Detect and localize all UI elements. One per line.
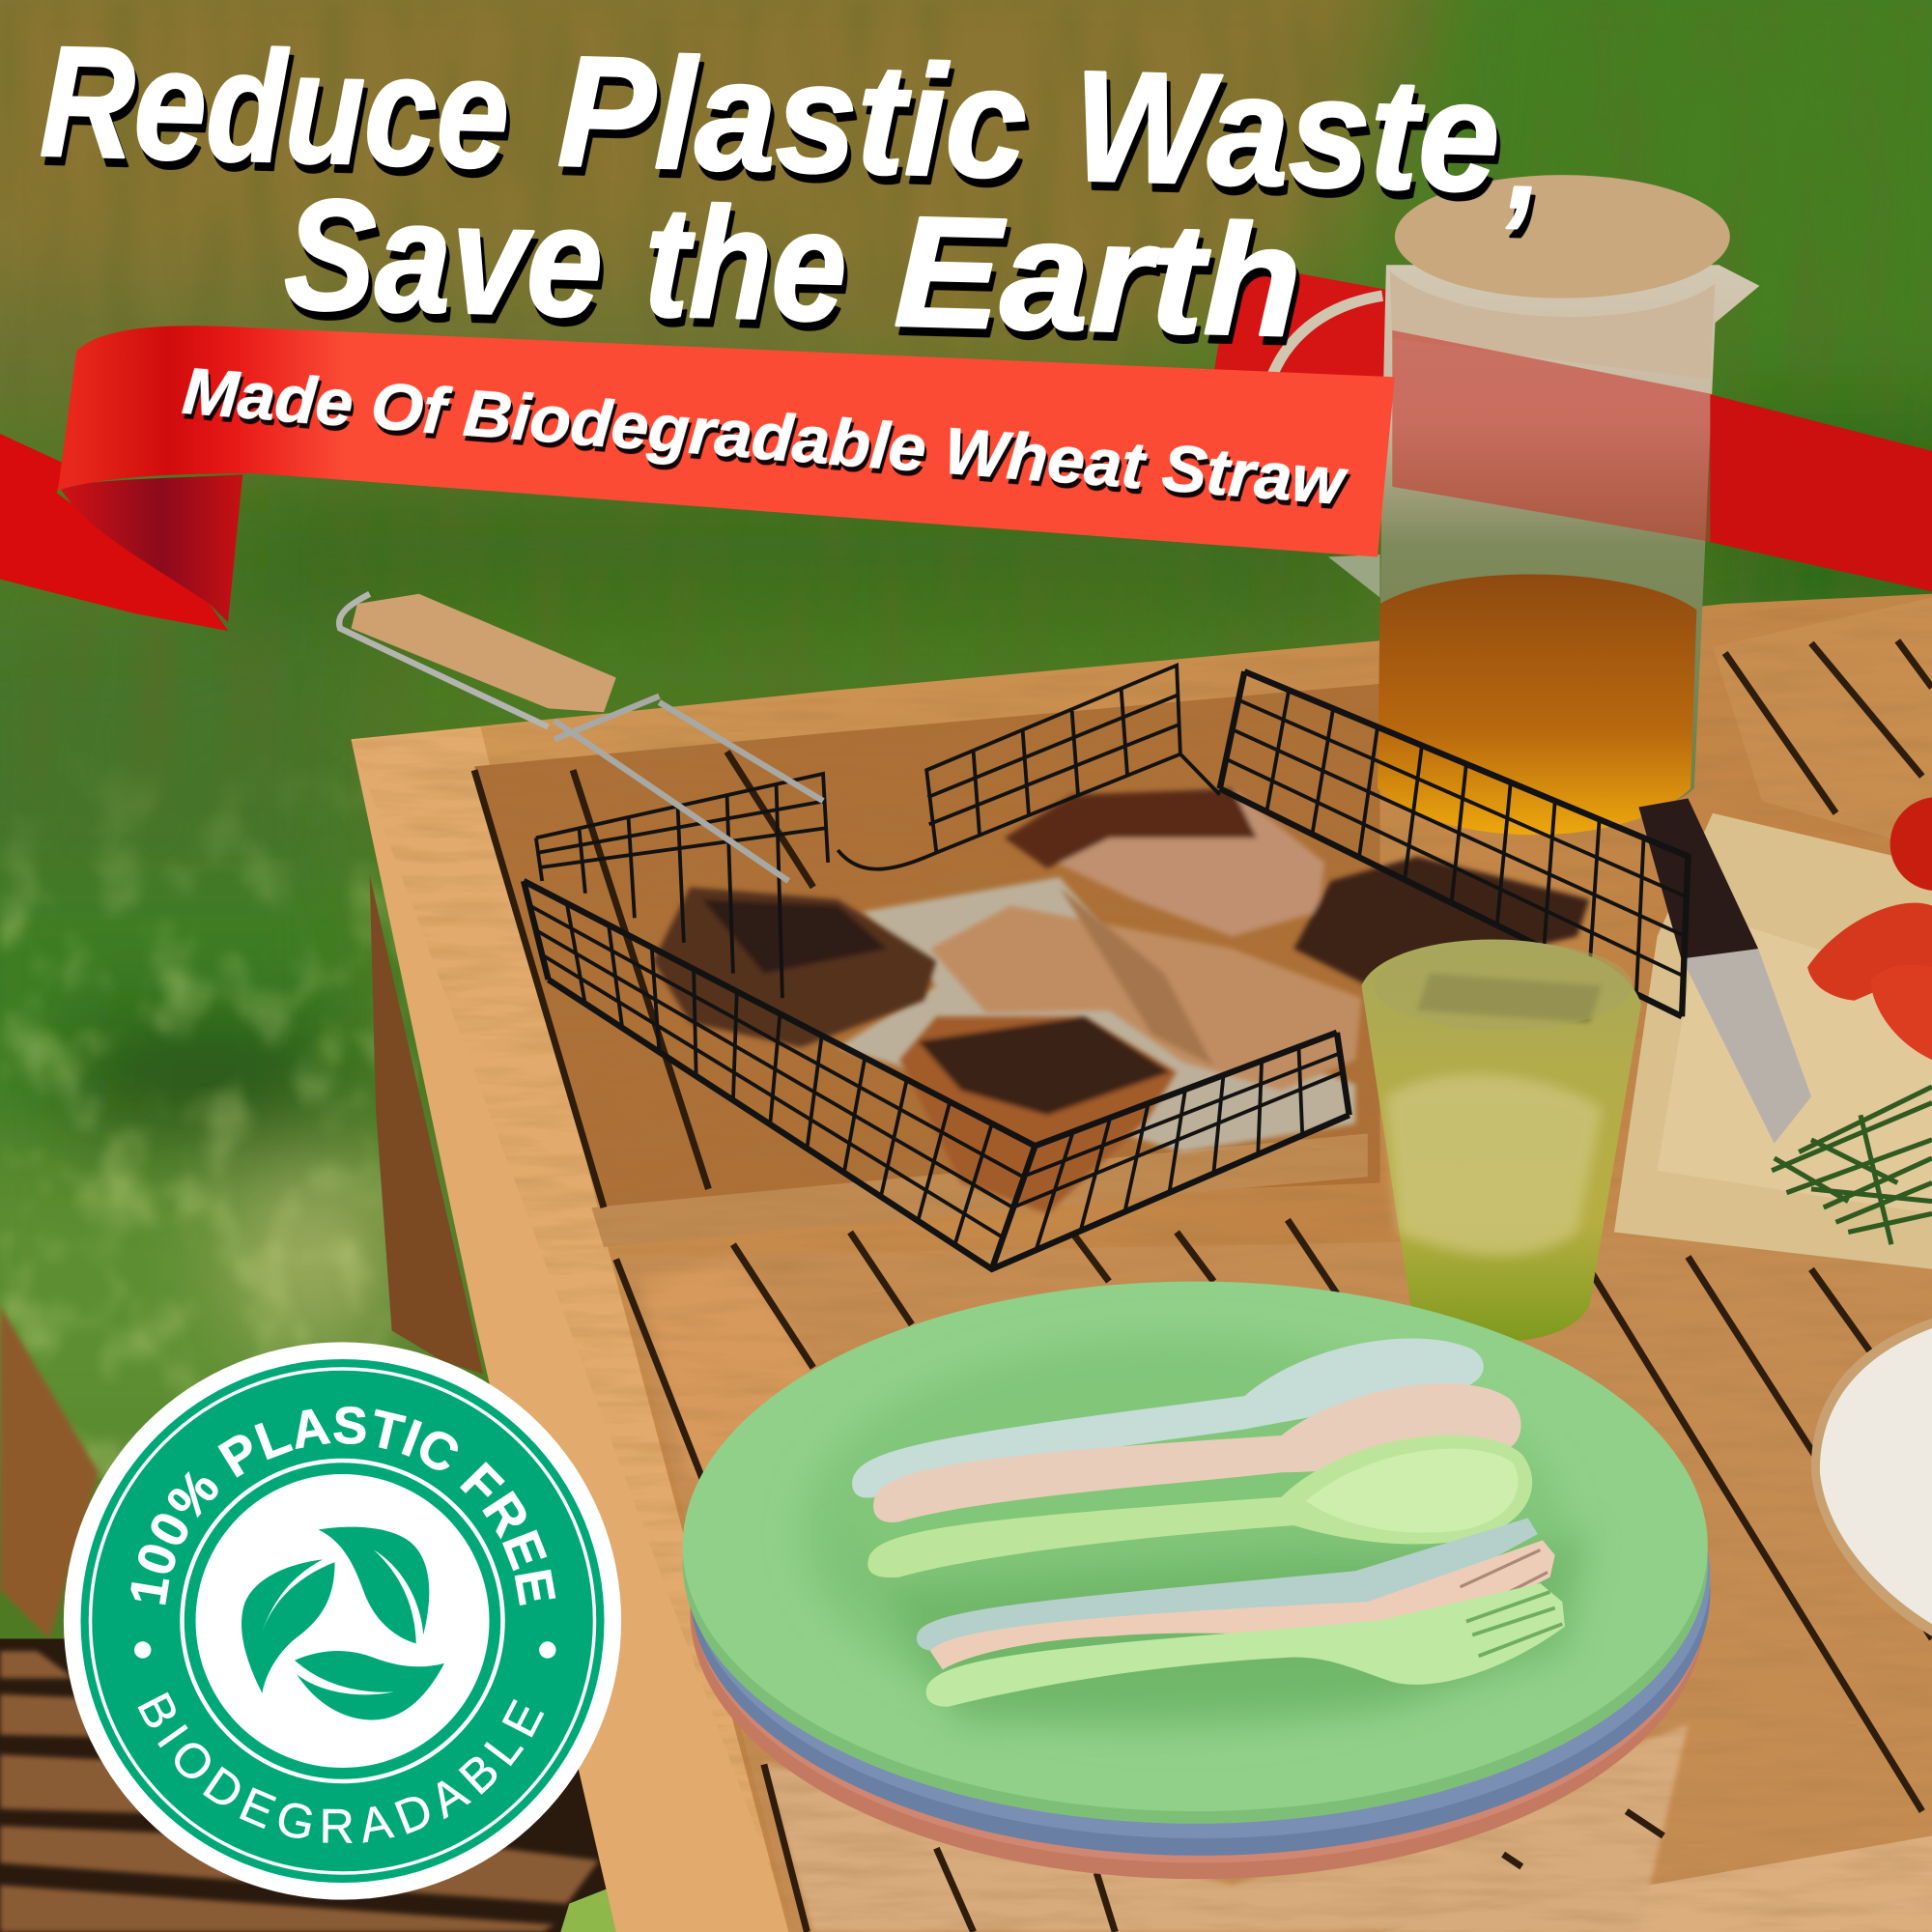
ribbon caption: Made Of Biodegradable Wheat Straw	[180, 355, 1350, 519]
tomatoes	[1807, 797, 1932, 1060]
title: Save	[282, 165, 605, 350]
rosemary	[1772, 1087, 1932, 1244]
top green plate	[683, 1282, 1708, 1811]
title: Reduce	[39, 13, 511, 201]
ribbon left tail and fold	[0, 434, 242, 631]
green fork tine gaps	[1466, 1592, 1562, 1656]
grill handle	[339, 594, 823, 881]
title: Earth	[893, 183, 1303, 370]
basket wires	[529, 690, 1687, 1249]
grilled chicken pieces	[653, 788, 1589, 1213]
badge top text: 100% PLASTIC FREE	[130, 1406, 556, 1605]
peach fork tine gaps	[1460, 1550, 1548, 1614]
jug body	[1378, 265, 1759, 826]
badge bottom text: BIODEGRADABLE	[137, 1692, 545, 1843]
badge dots	[134, 1641, 556, 1659]
green fork	[926, 1583, 1565, 1707]
blue plates	[690, 1328, 1710, 1856]
cutting board	[1614, 813, 1932, 1269]
peach spoon	[873, 1383, 1521, 1522]
title	[39, 13, 1544, 370]
plate well	[801, 1337, 1565, 1731]
title: Waste	[1071, 37, 1502, 225]
ribbon back section behind jug	[1208, 261, 1392, 412]
badge disc	[64, 1342, 621, 1900]
lower green plate	[683, 1301, 1708, 1824]
jug handle	[1263, 296, 1382, 412]
basket left wing	[536, 774, 828, 998]
ribbon front band	[58, 326, 1395, 557]
badge centre	[195, 1474, 489, 1768]
wooden table top	[352, 594, 1932, 1932]
green spoon bowl	[1306, 1449, 1518, 1533]
icon: three recycling leaves	[242, 1527, 444, 1719]
green spoon	[867, 1435, 1532, 1577]
peach fork	[930, 1540, 1555, 1669]
basket wall rails	[524, 671, 1688, 1269]
wheat straw spoons	[852, 1339, 1532, 1577]
tea	[1378, 575, 1696, 835]
wire grill basket	[524, 666, 1688, 1269]
cork lid	[1395, 175, 1730, 298]
stack of wheat straw plates	[683, 1282, 1710, 1879]
ribbon tail through and beyond jug	[1392, 330, 1932, 591]
white plate at right edge	[1811, 1319, 1932, 1636]
cutlery shadows on plate	[838, 1516, 1589, 1725]
wheat straw forks	[917, 1518, 1565, 1707]
table slat gaps	[474, 640, 1932, 1932]
title: ,	[1506, 84, 1544, 237]
jug lower lip	[1328, 554, 1380, 598]
green drinking glass	[1361, 939, 1641, 1341]
badge green ring	[81, 1359, 605, 1883]
basket right wing	[838, 666, 1220, 869]
knife	[1638, 799, 1811, 1144]
chair in lower left	[0, 1306, 629, 1932]
jug cork band	[1390, 271, 1716, 380]
title: the	[642, 173, 849, 355]
glass jug with cork lid	[1263, 175, 1759, 835]
blue fork	[917, 1518, 1538, 1651]
title: Plastic	[556, 22, 1029, 212]
plate under the grill	[838, 877, 1355, 1152]
blue spoon	[852, 1339, 1484, 1498]
badge: 100% plastic free, biodegradable	[64, 1342, 622, 1900]
salmon plates	[690, 1345, 1705, 1879]
table legs	[370, 875, 483, 1374]
